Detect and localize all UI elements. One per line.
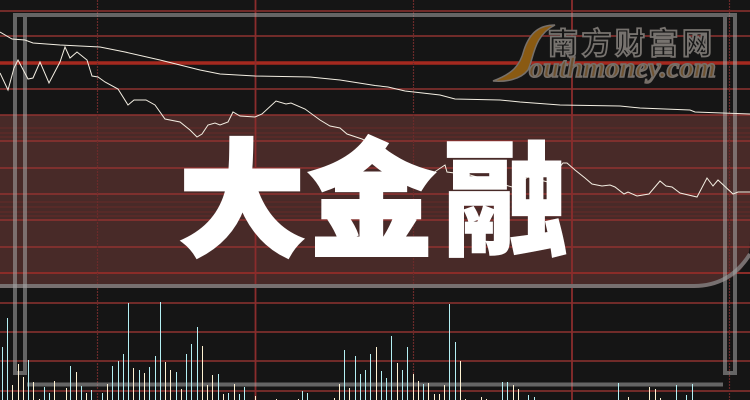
panel border [0, 254, 750, 286]
title: 金 [309, 100, 434, 281]
title: 融 [444, 100, 568, 281]
title [180, 100, 568, 281]
watermark Chinese name: 南方财富网 [548, 28, 712, 61]
panel: translucent title band [0, 115, 750, 286]
icon: swoosh S [493, 25, 555, 81]
watermark domain: outhmoney.com [529, 52, 716, 84]
title: 大 [180, 100, 304, 281]
volume bars [2, 302, 692, 400]
watermark logo: Southmoney [493, 25, 716, 84]
price line [0, 47, 750, 197]
moving average line [0, 32, 750, 114]
